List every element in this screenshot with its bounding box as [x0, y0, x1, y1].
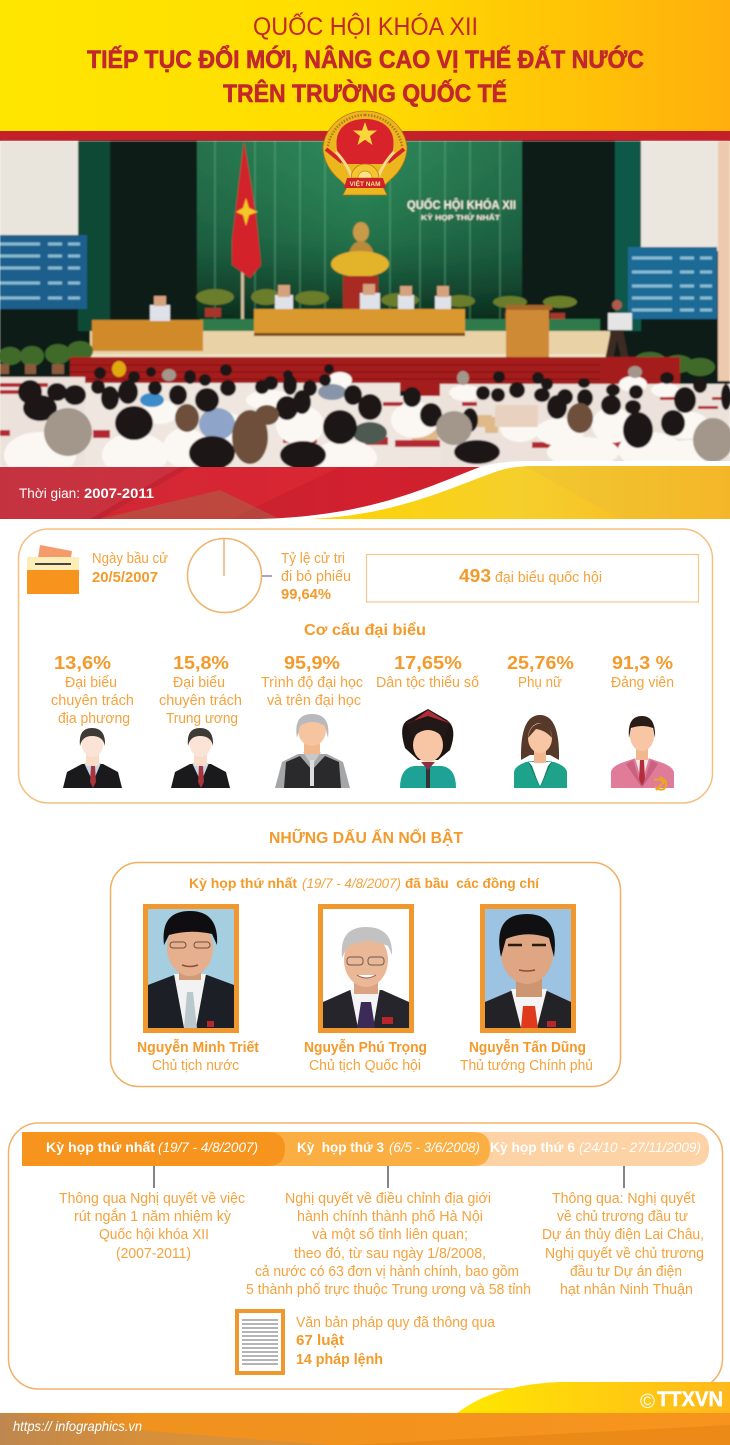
turnout text: đi bỏ phiếu: [281, 569, 351, 585]
title: TRÊN TRƯỜNG QUỐC TẾ: [223, 78, 507, 108]
panel: overview: [18, 529, 712, 803]
percentages: [54, 653, 673, 673]
session 1 text: Thông qua Nghị quyết về việc: [59, 1191, 245, 1207]
panel: sessions timeline: [8, 1123, 722, 1389]
category labels: Trung ương: [166, 711, 238, 727]
title: TIẾP TỤC ĐỔI MỚI, NÂNG CAO VỊ THẾ ĐẤT NƯỚC: [87, 44, 644, 74]
photo: stage floor: [90, 331, 610, 359]
photo: desks and podium: [92, 284, 552, 358]
pie chart: turnout: [188, 538, 272, 612]
session 6 text: Nghị quyết về chủ trương: [545, 1246, 704, 1262]
portrait: Nguyễn Minh Triết: [143, 904, 239, 1033]
footer: [0, 1382, 730, 1445]
photo: red steps: [70, 357, 680, 391]
time band: [0, 461, 730, 519]
photo: backdrop lettering: QUỐC HỘI KHÓA XII: [407, 197, 516, 212]
session bar: (24/10 - 27/11/2009): [579, 1139, 701, 1155]
category labels: Phụ nữ: [518, 675, 562, 691]
percentages: 17,65%: [394, 653, 462, 673]
panel: first session leaders: [110, 862, 620, 1086]
logo: TTXVN: TTXVN: [657, 1388, 723, 1411]
leader names: Nguyễn Minh Triết: [137, 1039, 259, 1056]
session 3 text: [246, 1191, 531, 1298]
session 6 text: đầu tư Dự án điện: [570, 1264, 682, 1280]
session bar: [22, 1132, 709, 1166]
session 6 text: hạt nhân Ninh Thuận: [560, 1282, 693, 1298]
percentages: 91,3 %: [612, 653, 673, 673]
election date: Ngày bầu cử: [92, 551, 168, 567]
photo: backdrop lettering: KỲ HỌP THỨ NHẤT: [421, 212, 501, 222]
category labels: Trình độ đại học: [261, 675, 363, 691]
session 3 text: cả nước có 63 đơn vị hành chính, bao gồm: [255, 1264, 519, 1280]
category labels: chuyên trách: [51, 693, 134, 709]
photo: screens: [0, 235, 717, 319]
session bar: Kỳ họp thứ 6: [490, 1139, 575, 1155]
session 6 text: [542, 1191, 704, 1298]
session bar: (19/7 - 4/8/2007): [158, 1139, 258, 1155]
icon: ethnic minority woman: [400, 709, 456, 788]
icon: document: [235, 1309, 285, 1375]
photo: camera operator: [602, 300, 632, 375]
session bar: (6/5 - 3/6/2008): [389, 1139, 480, 1155]
session 3 text: và một số tỉnh liên quan;: [312, 1227, 468, 1243]
legal documents text: 67 luật: [296, 1333, 344, 1349]
turnout text: 99,64%: [281, 587, 331, 603]
percentages: 95,9%: [284, 653, 340, 673]
icon: ballot box: [27, 545, 79, 594]
election date: 20/5/2007: [92, 570, 158, 586]
photo: backdrop lettering: [407, 197, 516, 222]
percentages: 13,6%: [54, 653, 111, 673]
icon: delegate man 1: [63, 728, 122, 788]
leader roles: Thủ tướng Chính phủ: [460, 1058, 593, 1074]
category labels: Đảng viên: [611, 675, 674, 691]
session 3 text: theo đó, từ sau ngày 1/8/2008,: [294, 1246, 486, 1262]
date label: [19, 486, 155, 501]
session 3 text: hành chính thành phố Hà Nội: [297, 1209, 483, 1225]
category labels: Đại biểu: [65, 675, 117, 691]
session 6 text: Dự án thủy điện Lai Châu,: [542, 1227, 704, 1243]
icon: elderly scholar: [275, 714, 350, 788]
leader names: [137, 1039, 586, 1056]
leader names: Nguyễn Tấn Dũng: [469, 1039, 586, 1056]
session bar: Kỳ họp thứ nhất: [46, 1139, 155, 1155]
emblem: VIỆT NAM: [349, 179, 381, 188]
date label: Thời gian:: [19, 486, 80, 501]
icon: party member with hammer and sickle: [611, 716, 674, 790]
photo: bust and flowers: [331, 222, 389, 310]
session 1 text: [59, 1191, 245, 1262]
panel subtitle: đã bầu các đồng chí: [405, 875, 540, 891]
delegates box: 493: [459, 566, 491, 586]
category labels: Dân tộc thiểu số: [376, 675, 479, 691]
panel subtitle: Kỳ họp thứ nhất: [189, 875, 297, 891]
percentages: 15,8%: [173, 653, 229, 673]
title: [87, 11, 644, 108]
photo: audience: [0, 361, 730, 478]
date label: 2007-2011: [84, 486, 155, 501]
header band: [0, 0, 730, 141]
heading: highlights: NHỮNG DẤU ẤN NỔI BẬT: [269, 827, 463, 847]
delegates box: [366, 554, 698, 602]
logo: TTXVN: ©: [640, 1391, 655, 1413]
url: https:// infographics.vn: [13, 1418, 142, 1434]
title: QUỐC HỘI KHÓA XII: [253, 11, 478, 41]
category labels: Đại biểu: [173, 675, 225, 691]
photo: plants left and right: [0, 341, 715, 376]
connector ticks: [154, 1166, 624, 1188]
session 6 text: Thông qua: Nghị quyết: [552, 1191, 695, 1207]
session 1 text: rút ngắn 1 năm nhiệm kỳ: [74, 1208, 232, 1225]
panel subtitle: [189, 875, 540, 891]
heading: delegate structure: Cơ cấu đại biểu: [304, 621, 426, 639]
turnout text: Tỷ lệ cử tri: [281, 551, 345, 567]
session 1 text: Quốc hội khóa XII: [99, 1227, 209, 1243]
category labels: [51, 675, 674, 727]
leader roles: [152, 1058, 593, 1074]
photo: plants on stage: [196, 289, 600, 331]
icon: woman: [514, 715, 567, 788]
legal documents text: [296, 1315, 496, 1368]
percentages: 25,76%: [507, 653, 574, 673]
leader roles: Chủ tịch Quốc hội: [309, 1058, 421, 1074]
session 3 text: 5 thành phố trực thuộc Trung ương và 58 tỉnh: [246, 1282, 531, 1298]
category labels: địa phương: [58, 711, 130, 727]
session 3 text: Nghị quyết về điều chỉnh địa giới: [285, 1191, 491, 1207]
legal documents text: Văn bản pháp quy đã thông qua: [296, 1315, 496, 1331]
session bar: Kỳ họp thứ 3: [297, 1139, 384, 1155]
photo: National Assembly hall: [0, 141, 730, 478]
photo: flag: [232, 141, 261, 320]
portrait: Nguyễn Phú Trọng: [318, 904, 414, 1033]
election date: [92, 551, 168, 586]
category labels: và trên đại học: [267, 693, 361, 709]
icon: delegate man 2: [171, 728, 230, 788]
legal documents text: 14 pháp lệnh: [296, 1352, 383, 1368]
leader names: Nguyễn Phú Trọng: [304, 1039, 427, 1056]
session 1 text: (2007-2011): [116, 1246, 191, 1262]
turnout text: [281, 551, 351, 603]
portrait: Nguyễn Tấn Dũng: [480, 904, 576, 1033]
session 6 text: về chủ trương đầu tư: [557, 1209, 688, 1225]
delegates box: đại biểu quốc hội: [495, 570, 602, 586]
emblem: [323, 111, 407, 195]
category labels: chuyên trách: [159, 693, 242, 709]
panel subtitle: (19/7 - 4/8/2007): [302, 875, 401, 891]
leader roles: Chủ tịch nước: [152, 1058, 239, 1074]
